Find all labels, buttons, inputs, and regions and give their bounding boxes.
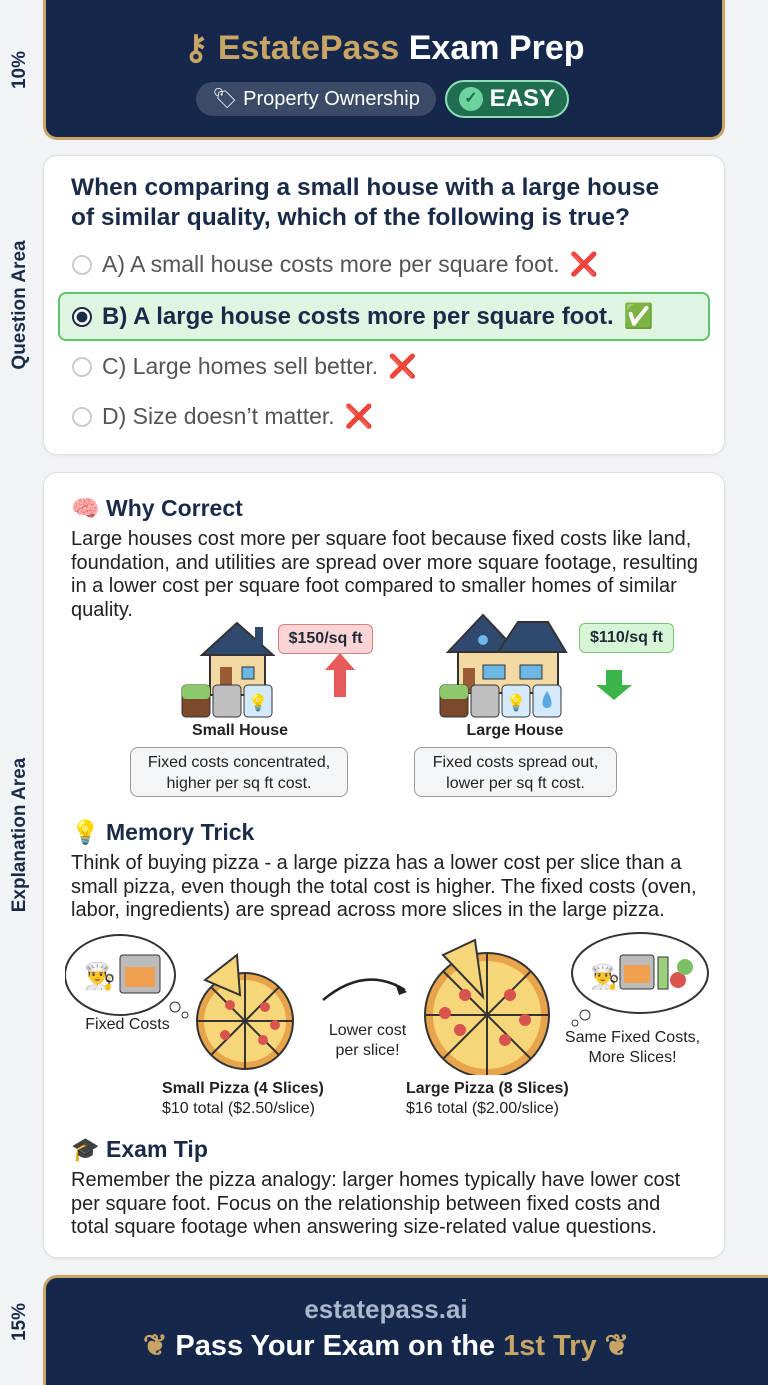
callout small: higher per sq ft cost.	[167, 775, 311, 792]
illustration: pizzas	[65, 932, 709, 1075]
callout large	[414, 747, 617, 797]
question card	[43, 155, 725, 455]
label: Same fixed costs	[565, 1029, 700, 1066]
label: Same fixed costs: Same Fixed Costs,	[565, 1029, 700, 1046]
callout large: lower per sq ft cost.	[446, 775, 585, 792]
price tag $150	[278, 624, 373, 654]
option A: A) A small house costs more per square foot.	[102, 251, 560, 277]
option C: ❌	[388, 353, 417, 379]
label: Fixed Costs: Fixed Costs	[85, 1016, 170, 1033]
option D: ❌	[345, 403, 373, 429]
heading: Exam Tip: 🎓 Exam Tip	[71, 1136, 208, 1162]
arrow down	[596, 670, 632, 700]
option A: ❌	[570, 251, 598, 277]
illustration: pizzas: 👨‍🍳	[84, 961, 116, 991]
caption: small pizza	[162, 1080, 324, 1117]
footer tagline: ❦ Pass Your Exam on the 1st Try ❦	[143, 1330, 629, 1362]
caption: large pizza: $16 total ($2.00/slice)	[406, 1100, 559, 1117]
text: ✅	[624, 303, 654, 330]
thought cloud right	[572, 933, 708, 1013]
caption: small pizza: Small Pizza (4 Slices)	[162, 1080, 324, 1097]
callout small: Fixed costs concentrated,	[148, 754, 330, 771]
footer panel	[43, 1275, 768, 1385]
badge: EASY: ✓	[464, 90, 478, 107]
illustration: large house	[440, 614, 632, 718]
large pizza	[425, 953, 549, 1077]
illustration: pizzas: 👨‍🍳	[590, 963, 620, 991]
price tag $110	[579, 623, 674, 653]
label: Lower cost per slice: per slice!	[335, 1042, 400, 1059]
illustration: large house: 💡	[506, 693, 526, 712]
label: Lower cost per slice: Lower cost	[329, 1022, 406, 1039]
illustration: small house	[182, 622, 355, 718]
badge: EASY	[445, 80, 569, 118]
option B correct	[58, 292, 710, 341]
side label: Explanation Area: Explanation Area	[9, 758, 30, 912]
label: Large House: Large House	[467, 722, 563, 739]
price tag $150: $150/sq ft	[289, 630, 362, 647]
explanation card	[43, 472, 725, 1258]
tag: Property Ownership	[196, 82, 436, 116]
arrow	[323, 980, 405, 1000]
text: memory trick: Think of buying pizza - a large pizza has a lower cost per slice than a small pizza, even though the total cost is higher. The fixed costs (oven, labor, ingredients) are spread across more slices in the large pizza.	[71, 852, 697, 921]
small pizza	[197, 973, 293, 1069]
badge: EASY: EASY	[490, 85, 555, 112]
text: why correct: Large houses cost more per square foot because fixed costs like land, foundation, and utilities are spread over more square footage, resulting in a lower cost per square foot compared to smaller homes of similar quality.	[71, 528, 698, 621]
arrow up	[325, 653, 355, 697]
heading: Why Correct: 🧠 Why Correct	[71, 495, 243, 521]
illustration: small house: 💡	[248, 693, 268, 712]
thought cloud left	[65, 935, 175, 1015]
text: exam tip: Remember the pizza analogy: larger homes typically have lower cost per square foot. Focus on the relationship between fixed costs and total square footage when answering size-related value questions.	[71, 1169, 680, 1238]
side label: Question Area: Question Area	[9, 240, 30, 370]
label: Same fixed costs: More Slices!	[588, 1049, 677, 1066]
callout large: Fixed costs spread out,	[433, 754, 598, 771]
caption: large pizza: Large Pizza (8 Slices)	[406, 1080, 569, 1097]
callout small	[130, 747, 348, 797]
label: Small House: Small House	[192, 722, 288, 739]
text: B) A large house costs more per square foot.	[102, 302, 614, 330]
option C: C) Large homes sell better.	[102, 353, 378, 379]
footer site: estatepass.ai	[304, 1294, 468, 1324]
caption: large pizza	[406, 1080, 569, 1117]
question text: When comparing a small house with a large house of similar quality, which of the following is true?	[71, 174, 659, 231]
heading: Memory Trick: 💡 Memory Trick	[71, 819, 254, 845]
price tag $110: $110/sq ft	[590, 629, 663, 646]
tag: Property Ownership: 🏷 Property Ownership	[212, 88, 420, 110]
option D: D) Size doesn’t matter.	[102, 403, 335, 429]
side label: 15%: 15%	[9, 1303, 30, 1341]
caption: small pizza: $10 total ($2.50/slice)	[162, 1100, 315, 1117]
title: ⚷ EstatePass Exam Prep	[183, 29, 585, 67]
header panel	[43, 0, 725, 140]
side label: 10%: 10%	[9, 51, 30, 89]
label: Lower cost per slice	[329, 1022, 406, 1059]
